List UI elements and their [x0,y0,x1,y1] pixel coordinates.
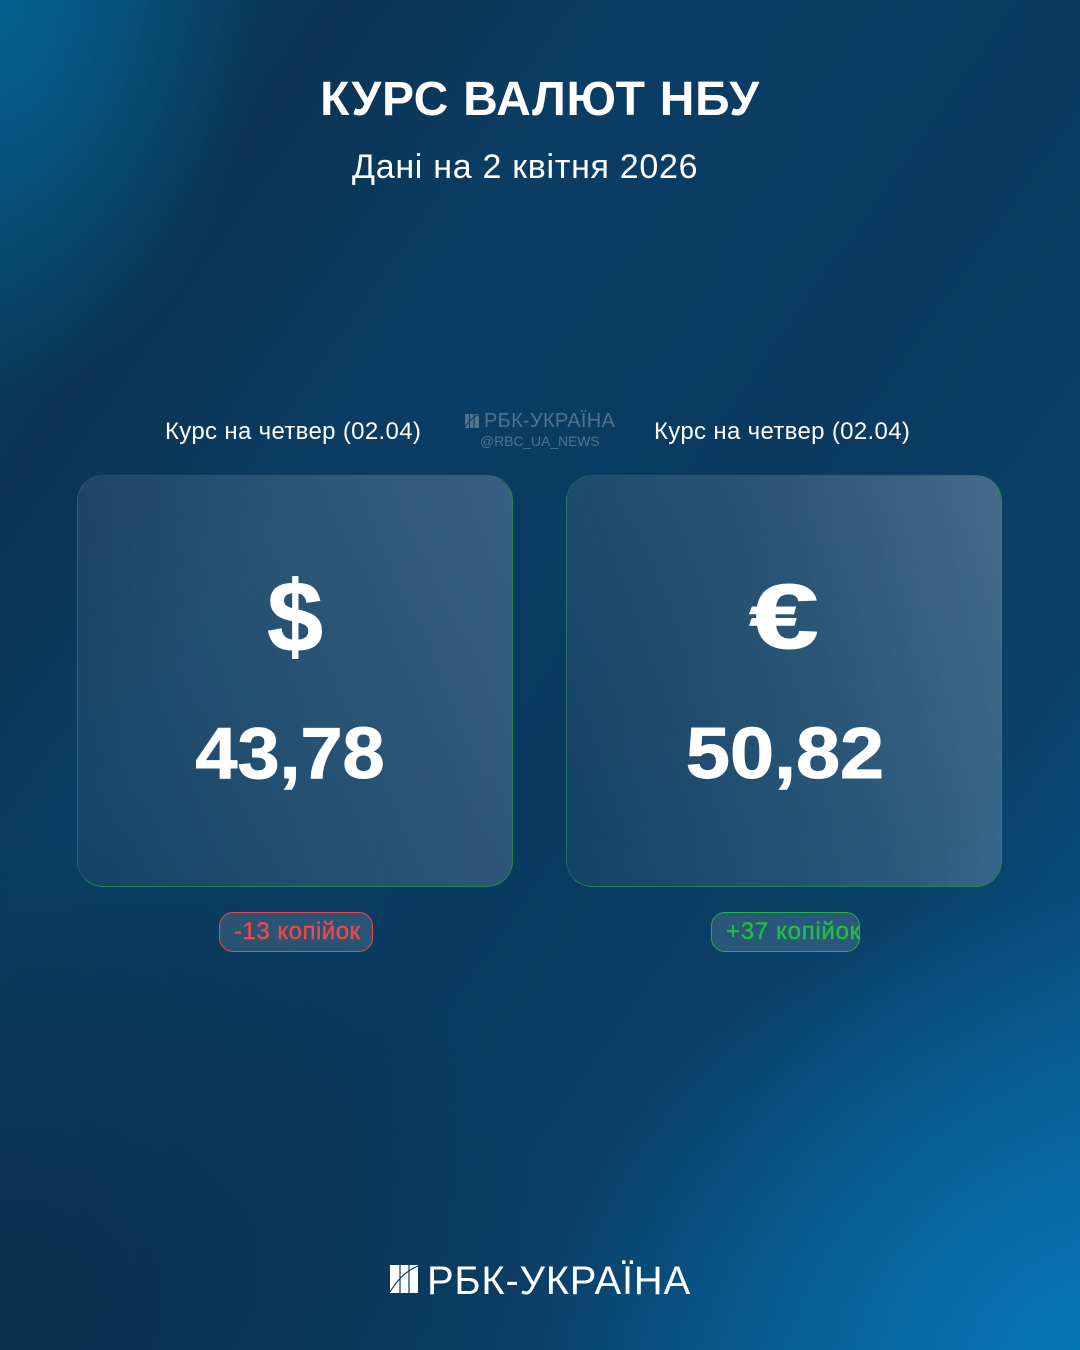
panel: dollar card [77,475,513,887]
label: dollar rate date: Курс на четвер (02.04) [165,418,421,445]
euro rate value: 50,82 [686,714,884,794]
panel: euro card [566,475,1002,887]
watermark: РБК-УКРАЇНА [484,410,615,432]
badge: euro change [711,912,860,952]
title: КУРС ВАЛЮТ НБУ [320,73,760,126]
watermark: @RBC_UA_NEWS [480,433,600,449]
icon: dollar sign: $ [267,561,323,673]
label: euro rate date: Курс на четвер (02.04) [654,418,910,445]
watermark [465,410,615,449]
badge: dollar change [219,912,373,952]
dollar rate value: 43,78 [195,714,385,794]
badge: dollar change: -13 копійок [234,918,361,945]
subtitle: date: Дані на 2 квітня 2026 [352,148,698,186]
icon: euro sign: € [749,566,819,668]
logo: RBC-Ukraine: РБК-УКРАЇНА [427,1259,691,1303]
badge: euro change: +37 копійок [726,918,861,945]
